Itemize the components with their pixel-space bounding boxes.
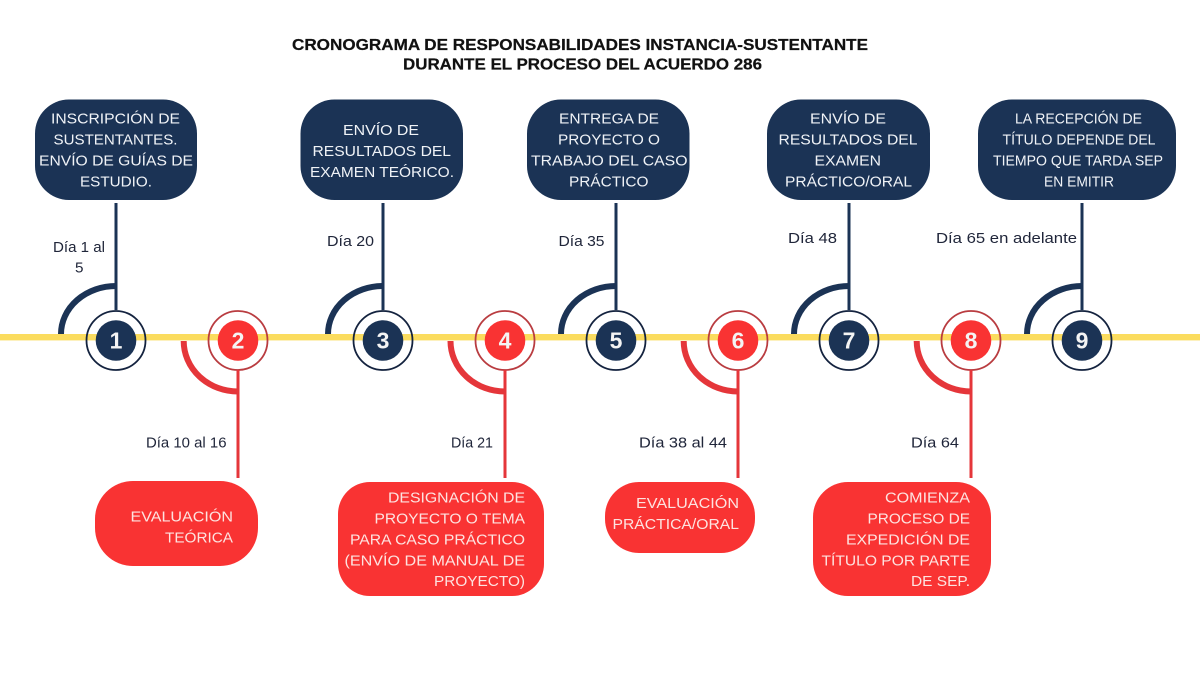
marker: step 8: 8	[965, 328, 978, 354]
date: step 3: Día 20	[327, 234, 374, 250]
connector: step 6	[684, 341, 738, 478]
panel: step 5 description: ENTREGA DE	[559, 110, 659, 127]
panel: step 9 description: EN EMITIR	[1044, 174, 1114, 190]
marker: step 7: 7	[843, 328, 855, 354]
marker: step 4	[476, 311, 534, 370]
connector: step 7	[794, 203, 849, 334]
marker: step 9	[1052, 311, 1112, 370]
date: step 6: Día 38 al 44	[639, 436, 727, 452]
marker: step 1	[86, 311, 146, 370]
panel: step 9 description: TIEMPO QUE TARDA SEP	[993, 154, 1163, 170]
panel: step 9 description: TÍTULO DEPENDE DEL	[1002, 132, 1156, 148]
date: step 7: Día 48	[788, 231, 837, 247]
title: DURANTE EL PROCESO DEL ACUERDO 286	[403, 56, 762, 74]
step 6	[605, 311, 768, 553]
title: CRONOGRAMA DE RESPONSABILIDADES INSTANCIA-SUSTENTANTE	[292, 37, 868, 54]
date: step 1	[53, 240, 105, 277]
marker: step 9: 9	[1076, 328, 1088, 354]
step 2	[95, 311, 268, 566]
date: step 1: 5	[75, 261, 84, 277]
panel: step 5 description	[527, 100, 690, 200]
panel: step 4 description: (ENVÍO DE MANUAL DE	[344, 552, 525, 569]
date: step 1: Día 1 al	[53, 240, 105, 256]
date: step 2: Día 10 al 16	[146, 436, 226, 452]
timeline axis	[0, 334, 1200, 340]
date: step 4: Día 21	[451, 436, 493, 452]
panel: step 8 description: COMIENZA	[885, 489, 970, 506]
panel: step 1 description: SUSTENTANTES.	[54, 131, 178, 148]
panel: step 7 description: PRÁCTICO/ORAL	[785, 173, 912, 190]
marker: step 5	[586, 311, 646, 370]
panel: step 8 description: EXPEDICIÓN DE	[846, 531, 970, 548]
panel: step 5 description: TRABAJO DEL CASO	[531, 152, 688, 169]
step 3	[300, 100, 463, 370]
step 9	[936, 100, 1176, 370]
panel: step 9 description: LA RECEPCIÓN DE	[1015, 110, 1142, 128]
panel: step 7 description: EXAMEN	[814, 152, 881, 169]
marker: step 7	[820, 311, 878, 370]
step 1	[35, 100, 197, 370]
panel: step 7 description: RESULTADOS DEL	[778, 131, 918, 148]
panel: step 6 description: EVALUACIÓN	[636, 495, 739, 512]
step 7	[767, 100, 930, 370]
date: step 8: Día 64	[911, 436, 959, 452]
connector: step 9	[1027, 203, 1082, 334]
panel: step 1 description	[35, 100, 197, 200]
panel: step 4 description	[338, 482, 544, 596]
connector: step 8	[917, 341, 971, 478]
marker: step 6	[708, 311, 768, 370]
marker: step 4: 4	[499, 328, 512, 354]
panel: step 6 description: PRÁCTICA/ORAL	[612, 516, 739, 533]
date: step 5: Día 35	[558, 234, 604, 250]
marker: step 2	[208, 311, 268, 370]
marker: step 8	[942, 311, 1000, 370]
connector: step 5	[561, 203, 616, 334]
connector: step 3	[328, 203, 383, 334]
panel: step 3 description	[300, 100, 463, 200]
panel: step 2 description	[95, 481, 258, 566]
panel: step 5 description: PROYECTO O	[558, 131, 660, 148]
panel: step 2 description: EVALUACIÓN	[130, 509, 233, 526]
marker: step 1: 1	[110, 328, 123, 354]
panel: step 1 description: ENVÍO DE GUÍAS DE	[39, 152, 193, 169]
panel: step 3 description: EXAMEN TEÓRICO.	[310, 164, 454, 181]
marker: step 2: 2	[232, 328, 244, 354]
panel: step 4 description: PROYECTO O TEMA	[374, 510, 525, 527]
panel: step 9 description	[978, 100, 1176, 200]
panel: step 7 description: ENVÍO DE	[810, 110, 886, 127]
panel: step 3 description: RESULTADOS DEL	[312, 143, 451, 160]
connector: step 2	[184, 341, 238, 478]
marker: step 6: 6	[732, 328, 744, 354]
panel: step 4 description: PROYECTO)	[434, 573, 525, 590]
marker: step 3: 3	[377, 328, 389, 354]
marker: step 5: 5	[610, 328, 623, 354]
panel: step 4 description: DESIGNACIÓN DE	[388, 489, 525, 506]
panel: step 8 description: DE SEP.	[911, 573, 970, 590]
panel: step 1 description: ESTUDIO.	[80, 173, 152, 190]
panel: step 4 description: PARA CASO PRÁCTICO	[350, 531, 525, 548]
marker: step 3	[354, 311, 412, 370]
connector: step 1	[61, 203, 116, 334]
date: step 9: Día 65 en adelante	[936, 231, 1077, 247]
step 4	[338, 311, 544, 596]
step 8	[813, 311, 1000, 596]
step 5	[527, 100, 690, 370]
connector: step 4	[450, 341, 505, 478]
panel: step 7 description	[767, 100, 930, 200]
panel: step 5 description: PRÁCTICO	[569, 173, 648, 190]
panel: step 1 description: INSCRIPCIÓN DE	[51, 110, 180, 127]
panel: step 8 description	[813, 482, 991, 596]
panel: step 8 description: PROCESO DE	[868, 510, 970, 527]
panel: step 3 description: ENVÍO DE	[343, 122, 419, 139]
panel: step 2 description: TEÓRICA	[165, 530, 233, 547]
panel: step 8 description: TÍTULO POR PARTE	[822, 552, 970, 569]
panel: step 6 description	[605, 482, 755, 553]
title	[292, 37, 868, 74]
